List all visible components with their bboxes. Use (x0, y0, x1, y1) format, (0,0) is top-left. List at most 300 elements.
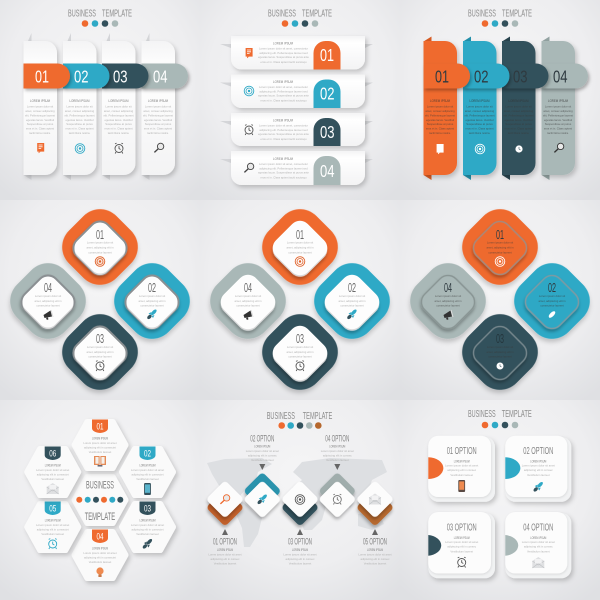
diamond 04: Lorem ipsum dolor sit (35, 294, 61, 298)
option 02: adipiscing elit in consec (248, 453, 277, 457)
diamond 02: consectetur laoreet (540, 304, 564, 308)
diamond 04: consectetur laoreet (36, 304, 60, 308)
diamond 04: 04 (44, 281, 52, 295)
column 3: egestas lacus. Vestibul (105, 118, 133, 122)
hexagon 05: 05 (49, 504, 56, 514)
panel: option cards (428, 409, 571, 578)
diamond 02: consectetur laoreet (340, 304, 364, 308)
column 3: Lorem ipsum dolor sit (105, 104, 132, 108)
option 02: Lorem ipsum dolor sit amet (246, 449, 279, 453)
card 01: 01 OPTION (447, 445, 477, 457)
icon: target (244, 86, 254, 96)
panel: diamonds white (201, 200, 399, 399)
heading: BUSINESS (468, 8, 496, 20)
icon: notepad (246, 48, 253, 58)
hexagon 03 (122, 502, 174, 550)
panel: white horizontal rows (220, 8, 373, 185)
card 04: 04 OPTION (523, 522, 553, 534)
icon: clock (496, 362, 504, 370)
icon: target (295, 495, 305, 504)
column 1: eros et in. Class aptent (426, 126, 454, 130)
card 03: LOREM IPSUM (454, 536, 470, 540)
column 1: eros et in. Class aptent (26, 126, 54, 130)
column 4: Suspendisse at purus (545, 122, 572, 126)
row 04: Lorem ipsum dolor sit amet, consectetur (259, 162, 308, 166)
row 03 (220, 113, 373, 146)
row 04: egestas lacus. Suspendisse at purus ante (258, 170, 309, 174)
column 2: Lorem ipsum dolor sit (66, 104, 93, 108)
column 2: egestas lacus. Vestibul (66, 118, 94, 122)
icon: rocket (146, 309, 158, 320)
hexagon 04: LOREM IPSUM (92, 547, 108, 551)
column 3: taciti litora nostra. (108, 131, 130, 135)
diamond 04 (201, 254, 295, 348)
column 4: amet, consec adipiscing (143, 109, 173, 113)
hexagon 01: LOREM IPSUM (92, 437, 108, 441)
diamond 04: amet, adipiscing elit in (234, 299, 262, 303)
diamond 04: amet, adipiscing elit in (434, 299, 462, 303)
icon: light bulb (96, 567, 104, 577)
row 03: eros et in. Class aptent taciti sociosqu (260, 137, 307, 141)
option 01: LOREM IPSUM (217, 548, 233, 552)
diamond 02: amet, adipiscing elit in (138, 299, 166, 303)
option 01: 01 OPTION (213, 536, 237, 546)
diamond 01 (253, 200, 347, 294)
world map (207, 458, 387, 547)
number tab 02: 02 (320, 84, 334, 104)
column 1: egestas lacus. Vestibul (26, 118, 54, 122)
column 2 (463, 36, 496, 180)
card 03: Lorem ipsum dolor sit amet (445, 540, 479, 544)
icon: magnifier (154, 143, 164, 152)
option 01: Vestibulum laoreet (214, 562, 237, 566)
heading: TEMPLATE (102, 8, 132, 20)
diamond 04: Lorem ipsum dolor sit (235, 294, 261, 298)
card 02: Lorem ipsum dolor sit amet (522, 464, 555, 468)
diamond 02 (305, 254, 399, 348)
icon: alarm clock (296, 361, 304, 371)
column 4: elit. Pellentesque laoreet (543, 114, 573, 118)
option 04: Lorem ipsum dolor sit amet (321, 449, 354, 453)
column 4: taciti litora nostra. (147, 131, 169, 135)
card 04: LOREM IPSUM (530, 536, 546, 540)
diamond 01: 01 (496, 228, 504, 242)
icon: notepad (37, 143, 44, 153)
column 4: egestas lacus. Vestibul (144, 118, 172, 122)
diamond 01: amet, adipiscing elit in (286, 245, 314, 249)
column 3: elit. Pellentesque laoreet (103, 114, 134, 118)
colour dots (482, 20, 518, 27)
column 4: Lorem ipsum dolor sit (545, 104, 571, 108)
option 01 (206, 480, 244, 566)
hexagon 06: LOREM IPSUM (45, 464, 61, 468)
card 02: Vestibulum laoreet (527, 473, 550, 477)
hexagon 03: 03 (144, 504, 151, 514)
colour dots (482, 422, 518, 428)
column 4: elit. Pellentesque laoreet (143, 114, 173, 118)
option 01: adipiscing elit in consec (211, 557, 240, 561)
number tab 03 (314, 118, 340, 146)
column 4: Lorem ipsum dolor sit (145, 104, 171, 108)
icon: book (94, 456, 106, 466)
column 3: Suspendisse at purus (505, 122, 532, 126)
heading: TEMPLATE (502, 8, 532, 20)
option 05: Vestibulum laoreet (364, 562, 387, 566)
row 03: adipiscing elit. Pellentesque laoreet sed (259, 128, 308, 132)
diamond 02: Lorem ipsum dolor sit (539, 294, 565, 298)
row 02: adipiscing elit. Pellentesque laoreet sed (259, 90, 308, 94)
option 04: LOREM IPSUM (329, 444, 345, 448)
hexagon 02 (122, 446, 174, 496)
card 03 (428, 512, 495, 578)
ribbon 02: 02 (74, 66, 88, 86)
diamond 03: consectetur laoreet (88, 354, 112, 358)
icon: alarm clock (115, 143, 123, 154)
icon: envelope (369, 494, 381, 504)
column 4: LOREM IPSUM (548, 98, 568, 103)
hexagon 03: Lorem ipsum dolor sit amet (131, 523, 164, 527)
icon: magnifier (244, 163, 254, 172)
card 01: LOREM IPSUM (454, 460, 470, 464)
diamond 04: 04 (444, 281, 452, 295)
icon: rocket (257, 494, 268, 505)
row 01: adipiscing elit. Pellentesque laoreet sed (259, 51, 308, 55)
column 2: LOREM IPSUM (470, 98, 490, 103)
card 03: Vestibulum laoreet (450, 550, 473, 554)
diamond 04: Lorem ipsum dolor sit (435, 294, 461, 298)
row 04: adipiscing elit. Pellentesque laoreet sed (259, 166, 308, 170)
card 01 (428, 436, 495, 502)
diamond 04: consectetur laoreet (236, 304, 260, 308)
hexagon 01: 01 (96, 422, 104, 432)
column 2: LOREM IPSUM (70, 98, 90, 103)
icon: target (495, 257, 505, 266)
option 05: adipiscing elit in consec (361, 557, 390, 561)
row 02: egestas lacus. Suspendisse at purus ante (258, 94, 309, 98)
column 1 (424, 36, 457, 180)
column 3: elit. Pellentesque laoreet (503, 114, 534, 118)
column 4: egestas lacus. Vestibul (544, 118, 572, 122)
row 03: egestas lacus. Suspendisse at purus ante (258, 132, 309, 136)
card 01: Lorem ipsum dolor sit amet (445, 464, 479, 468)
card 01: adipiscing elit in consec (447, 468, 477, 472)
column 2: Lorem ipsum dolor sit (466, 104, 493, 108)
option 02: 02 OPTION (250, 434, 274, 444)
column 2: elit. Pellentesque laoreet (464, 114, 495, 118)
diamond 02: consectetur laoreet (140, 304, 164, 308)
diamond 04 (1, 254, 95, 348)
icon: target (475, 144, 485, 154)
panel: diamonds with grey ring (1, 200, 199, 399)
column 2: taciti litora nostra. (69, 131, 91, 135)
card 02: 02 OPTION (523, 445, 553, 457)
central hexagon (74, 476, 126, 524)
icon: rocket (346, 309, 358, 320)
column 2: eros et in. Class aptent (465, 126, 494, 130)
card 03: adipiscing elit in consec (447, 545, 477, 549)
row 03: Lorem ipsum dolor sit amet, consectetur (259, 124, 308, 128)
column 2: amet, consec adipiscing (465, 109, 495, 113)
diamond 02: Lorem ipsum dolor sit (139, 294, 165, 298)
hexagon 01: Lorem ipsum dolor sit amet (83, 441, 117, 445)
diamond 02 (105, 254, 199, 348)
card 02: LOREM IPSUM (530, 460, 546, 464)
hexagon 03: Vestibulum laoreet (136, 532, 159, 536)
option 03: adipiscing elit in consec (286, 557, 315, 561)
panel: white vertical columns (24, 8, 188, 180)
option 04: Vestibulum laoreet (326, 458, 349, 462)
option 03: 03 OPTION (288, 536, 312, 546)
column 3: eros et in. Class aptent (504, 126, 533, 130)
hexagon 05: adipiscing elit in consectet (37, 527, 69, 531)
central hexagon: BUSINESS (86, 480, 114, 492)
diamond 01: consectetur laoreet (288, 250, 312, 254)
hexagon 01 (74, 420, 126, 468)
diamond 01 (53, 200, 147, 294)
heading: TEMPLATE (502, 409, 532, 420)
column 1: egestas lacus. Vestibul (426, 118, 454, 122)
ribbon 04 (542, 64, 588, 88)
column 3: egestas lacus. Vestibul (505, 118, 533, 122)
ribbon 03 (102, 64, 148, 88)
option 05: 05 OPTION (363, 536, 387, 546)
heading: TEMPLATE (302, 8, 332, 20)
diamond 04: 04 (244, 281, 252, 295)
icon: rocket (142, 538, 153, 549)
panel: coloured diamonds (401, 200, 599, 399)
icon: magnifier (220, 495, 230, 504)
hexagon 05: LOREM IPSUM (45, 519, 61, 523)
diamond 03: 03 (96, 332, 104, 346)
column 3: LOREM IPSUM (108, 98, 128, 103)
row 01: Lorem ipsum dolor sit amet, consectetur (259, 46, 308, 50)
column 2: Suspendisse at purus (66, 122, 93, 126)
column 2: egestas lacus. Vestibul (466, 118, 494, 122)
column 4: eros et in. Class aptent (144, 126, 172, 130)
column 1: Lorem ipsum dolor sit (27, 104, 53, 108)
icon: calendar (333, 494, 341, 504)
column 2: Suspendisse at purus (466, 122, 493, 126)
hexagon 01: Vestibulum laoreet (89, 450, 112, 454)
column 4 (142, 33, 175, 180)
diamond 04: consectetur laoreet (436, 304, 460, 308)
icon: megaphone (244, 310, 253, 320)
number tab 04 (314, 156, 340, 185)
column 4: eros et in. Class aptent (544, 126, 572, 130)
option 05: Lorem ipsum dolor sit amet (358, 552, 392, 556)
column 3: LOREM IPSUM (508, 98, 528, 103)
diamond 01: amet, adipiscing elit in (486, 245, 514, 249)
column 3 (102, 33, 136, 180)
hexagon 06: Lorem ipsum dolor sit amet (36, 468, 70, 472)
hexagon 04: adipiscing elit in consectet (84, 555, 116, 559)
column 3: eros et in. Class aptent (104, 126, 133, 130)
option 03: Lorem ipsum dolor sit amet (283, 552, 317, 556)
hexagon 02: Lorem ipsum dolor sit amet (131, 468, 164, 472)
heading: BUSINESS (267, 411, 295, 422)
hexagon 04: Lorem ipsum dolor sit amet (83, 551, 117, 555)
column 1: Lorem ipsum dolor sit (427, 104, 453, 108)
hexagon 05: Lorem ipsum dolor sit amet (36, 523, 70, 527)
diamond 04 (401, 254, 495, 348)
row 01: egestas lacus. Suspendisse at purus ante (258, 55, 309, 59)
hexagon 02: 02 (144, 448, 151, 458)
hexagon 04: 04 (96, 532, 104, 542)
diamond 01 (453, 200, 547, 294)
diamond 03: 03 (296, 332, 304, 346)
diamond 03: amet, adipiscing elit in (486, 350, 514, 354)
number tab 04: 04 (320, 161, 335, 181)
ribbon 01 (24, 64, 70, 88)
diamond 01: amet, adipiscing elit in (86, 245, 114, 249)
panel: coloured vertical columns (424, 8, 588, 180)
column 4: Suspendisse at purus (145, 122, 172, 126)
hexagon 02: Vestibulum laoreet (136, 477, 159, 481)
icon: alarm clock (49, 539, 57, 549)
heading: BUSINESS (268, 8, 296, 20)
hexagon 02: LOREM IPSUM (140, 464, 156, 468)
row 01: eros et in. Class aptent taciti sociosqu (260, 60, 307, 64)
number tab 01: 01 (320, 45, 334, 65)
icon: notepad (437, 144, 444, 154)
hexagon 05: Vestibulum laoreet (41, 532, 64, 536)
row 02 (220, 74, 373, 108)
row 02: Lorem ipsum dolor sit amet, consectetur (259, 85, 308, 89)
diamond 02: 02 (148, 281, 156, 295)
diamond 03: Lorem ipsum dolor sit (287, 345, 313, 349)
hexagon 03: adipiscing elit in consectet (132, 527, 164, 531)
diamond 01: consectetur laoreet (488, 250, 512, 254)
hexagon 06: Vestibulum laoreet (41, 477, 64, 481)
diamond 01: 01 (96, 228, 104, 242)
icon: alarm clock (245, 125, 253, 135)
option 03 (281, 480, 319, 566)
column 2 (63, 33, 96, 180)
hexagon 04 (74, 530, 126, 578)
icon: target (75, 144, 85, 153)
column 1 (24, 33, 57, 180)
card 04: Vestibulum laoreet (527, 550, 550, 554)
column 1: taciti litora nostra. (29, 131, 51, 135)
column 4: LOREM IPSUM (148, 98, 168, 103)
diamond 02: amet, adipiscing elit in (338, 299, 366, 303)
column 3: taciti litora nostra. (508, 131, 530, 135)
option 04 (318, 434, 356, 518)
ribbon 04 (142, 64, 188, 88)
hexagon 06: 06 (49, 448, 56, 458)
column 1: LOREM IPSUM (30, 98, 50, 103)
heading: TEMPLATE (303, 411, 332, 422)
diamond 03: amet, adipiscing elit in (286, 350, 314, 354)
column 2: elit. Pellentesque laoreet (64, 114, 95, 118)
hexagon 01: adipiscing elit in consectet (84, 445, 116, 449)
column 1: elit. Pellentesque laoreet (25, 114, 55, 118)
diamond 01: Lorem ipsum dolor sit (287, 241, 313, 245)
ribbon 04: 04 (553, 66, 568, 86)
icon: clock (515, 145, 523, 153)
colour dots (278, 422, 322, 429)
colour dots (82, 20, 118, 27)
column 1: amet, consec adipiscing (25, 109, 55, 113)
diamond 04: amet, adipiscing elit in (34, 299, 62, 303)
diamond 02: 02 (348, 281, 356, 295)
column 4 (542, 36, 575, 180)
number tab 02 (314, 80, 340, 108)
ribbon 01: 01 (35, 66, 49, 86)
diamond 03 (453, 305, 547, 399)
column 3: Lorem ipsum dolor sit (505, 104, 532, 108)
card 04: adipiscing elit in consec (524, 545, 553, 549)
option 03: Vestibulum laoreet (289, 562, 312, 566)
ribbon 03: 03 (513, 66, 528, 86)
column 1: Suspendisse at purus (427, 122, 454, 126)
icon: envelope (532, 557, 544, 568)
diamond 03: Lorem ipsum dolor sit (87, 345, 113, 349)
icon: megaphone (444, 310, 453, 320)
diamond 01: 01 (296, 228, 304, 242)
icon: magnifier (554, 143, 564, 152)
ribbon 02 (463, 64, 509, 88)
row 01 (220, 36, 373, 70)
option 02 (243, 434, 281, 518)
diamond 03 (253, 305, 347, 399)
ribbon 02 (63, 64, 110, 88)
diamond 03: consectetur laoreet (288, 354, 312, 358)
number tab 03: 03 (320, 122, 334, 142)
hexagon 06: adipiscing elit in consectet (37, 472, 69, 476)
column 3: amet, consec adipiscing (104, 109, 134, 113)
hexagon 06 (27, 446, 79, 496)
icon: megaphone (44, 310, 53, 320)
diamond 02: amet, adipiscing elit in (538, 299, 566, 303)
icon: alarm clock (96, 361, 104, 371)
diamond 03: amet, adipiscing elit in (86, 350, 114, 354)
heading: BUSINESS (468, 409, 496, 420)
option 03: LOREM IPSUM (292, 548, 308, 552)
row 04: LOREM IPSUM (273, 156, 293, 161)
column 1: amet, consec adipiscing (425, 109, 455, 113)
ribbon 02: 02 (474, 66, 488, 86)
card 04: Lorem ipsum dolor sit amet (522, 540, 555, 544)
icon: alarm clock (458, 557, 466, 568)
option 04: adipiscing elit in consec (323, 453, 352, 457)
ribbon 01 (424, 64, 470, 88)
column 2: taciti litora nostra. (469, 131, 491, 135)
panel: world map timeline (206, 411, 394, 566)
diamond 03: Lorem ipsum dolor sit (487, 345, 513, 349)
icon: target (295, 257, 305, 266)
row 04 (220, 151, 373, 185)
column 3: amet, consec adipiscing (504, 109, 534, 113)
card 02 (505, 436, 571, 502)
option 01: Lorem ipsum dolor sit amet (208, 552, 242, 556)
panel: hexagons (27, 420, 174, 578)
option 05: LOREM IPSUM (367, 548, 383, 552)
ribbon 04: 04 (153, 66, 168, 86)
option 02: LOREM IPSUM (254, 444, 270, 448)
diamond 01: Lorem ipsum dolor sit (87, 241, 113, 245)
diamond 01: consectetur laoreet (88, 250, 112, 254)
number tab 01 (314, 41, 340, 70)
row 04: eros et in. Class aptent taciti sociosqu (260, 176, 307, 180)
hexagon 02: adipiscing elit in consectet (132, 472, 164, 476)
diamond 03 (53, 305, 147, 399)
colour dots (282, 20, 318, 27)
row 02: LOREM IPSUM (273, 79, 293, 84)
diamond 03: 03 (496, 332, 504, 346)
diamond 01: Lorem ipsum dolor sit (487, 241, 513, 245)
column 1: LOREM IPSUM (430, 98, 450, 103)
